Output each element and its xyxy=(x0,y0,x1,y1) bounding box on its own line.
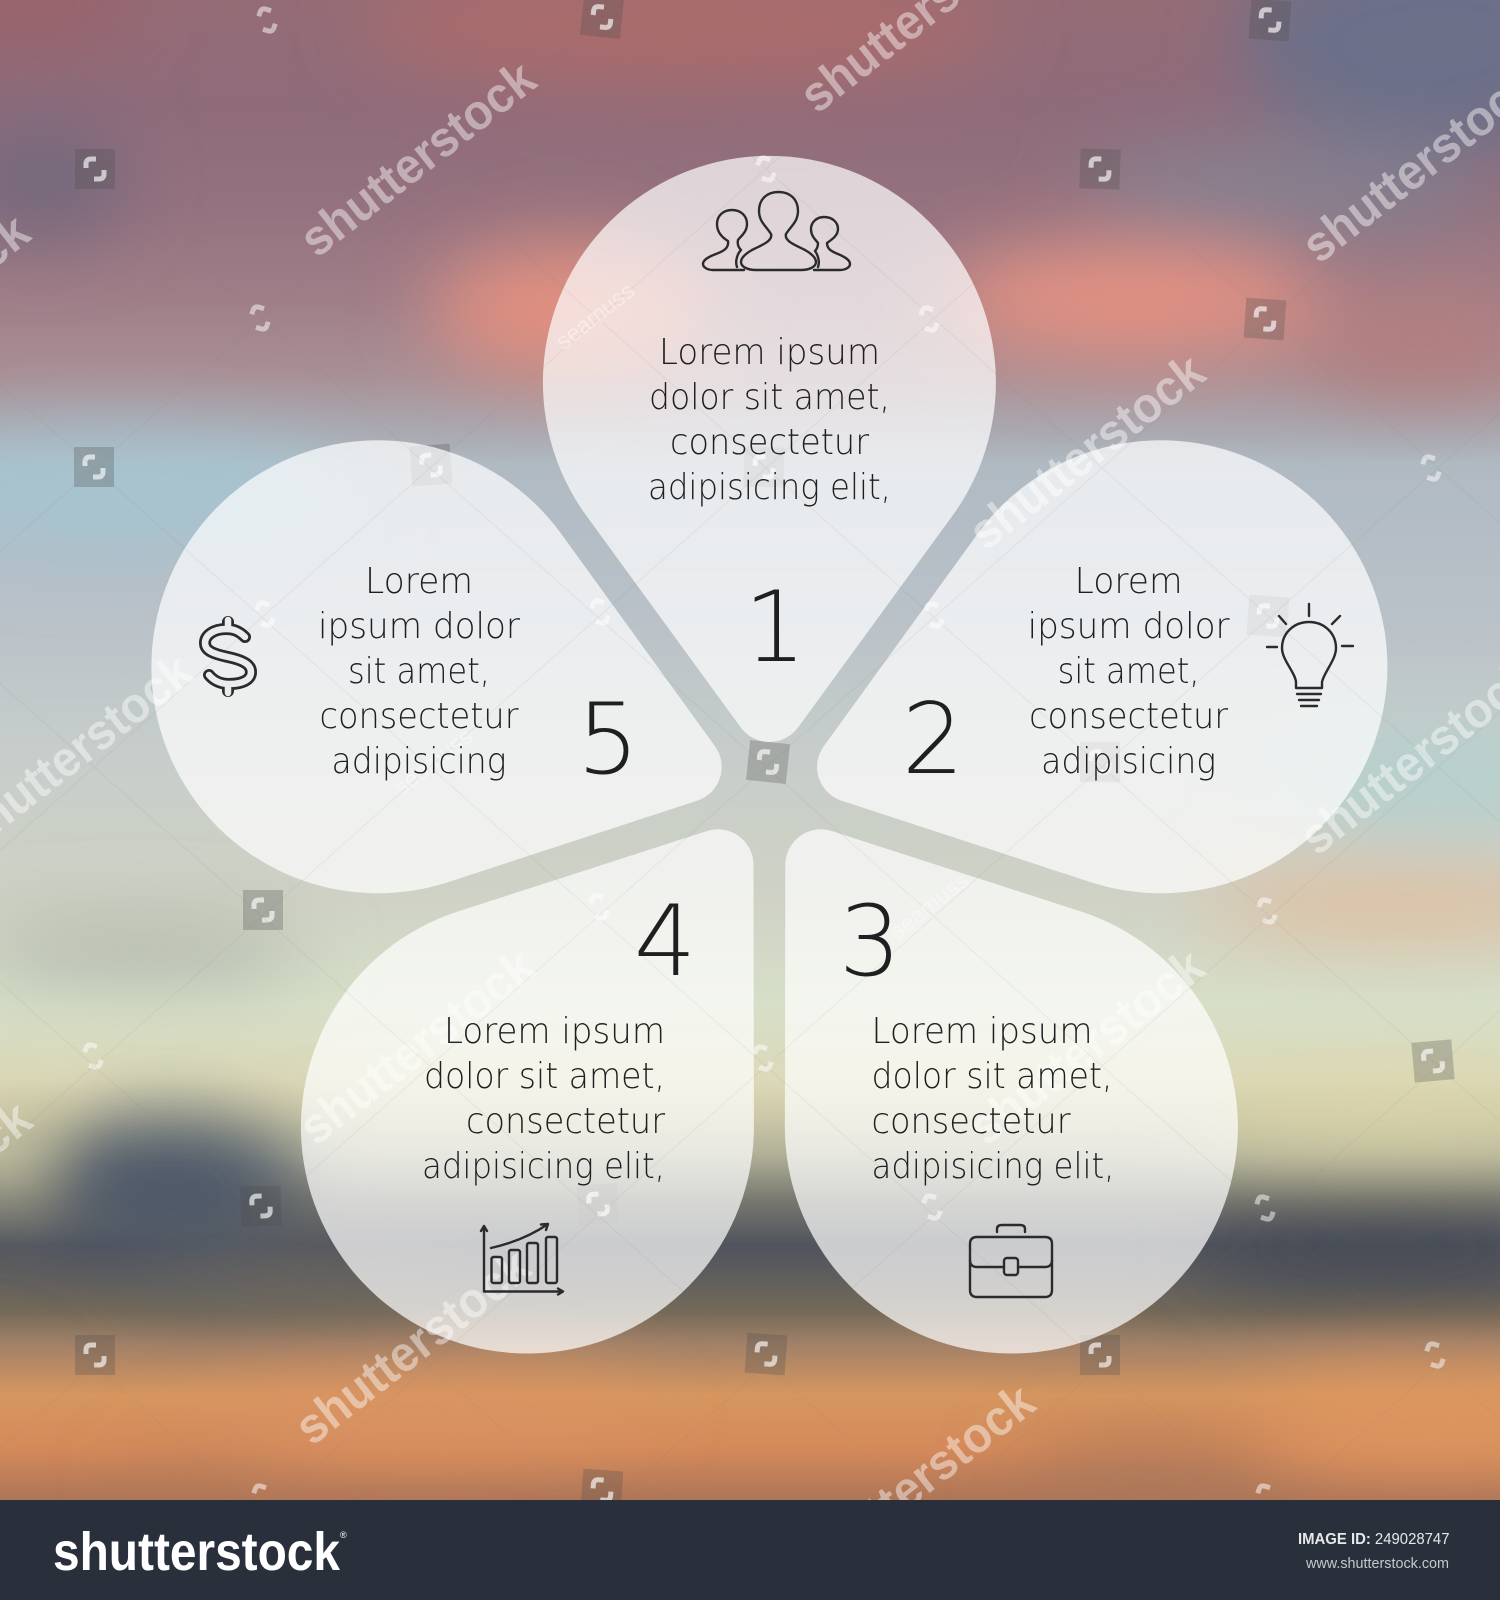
text: petal 5: ipsum dolor xyxy=(318,606,520,647)
text: petal 2: Lorem xyxy=(1075,561,1183,602)
text: petal 3: dolor sit amet, xyxy=(872,1056,1112,1097)
footer bar xyxy=(0,1500,1500,1600)
text: petal 5: consectetur xyxy=(320,696,519,737)
watermark: open hook icons over petals xyxy=(253,157,946,1219)
watermark: seamuss small text: seamuss xyxy=(885,867,973,944)
footer website: www.shutterstock.com xyxy=(1305,1555,1449,1572)
text: petal 1: adipisicing elit, xyxy=(648,467,891,508)
text: petal 5 xyxy=(318,561,520,782)
text: petal 2: adipisicing xyxy=(1041,741,1216,782)
watermark: seamuss small text: seamuss xyxy=(389,723,477,800)
text: petal 2 xyxy=(1028,561,1230,782)
watermark: diagonal shutterstock text: shutterstock xyxy=(958,343,1215,560)
watermark: diagonal shutterstock text: shutterstock xyxy=(284,1238,541,1455)
numbers: 2 xyxy=(902,683,964,797)
watermark: seamuss small text: seamuss xyxy=(551,277,639,354)
text: petal 2: ipsum dolor xyxy=(1028,606,1230,647)
icon: dollar sign xyxy=(205,620,251,693)
text: petal 2: sit amet, xyxy=(1058,651,1200,692)
text: petal 4: consectetur xyxy=(466,1101,665,1142)
text: petal 4: adipisicing elit, xyxy=(422,1146,665,1187)
text: petal 1: Lorem ipsum xyxy=(659,332,880,373)
petal 5 xyxy=(92,381,790,993)
text: petal 3: adipisicing elit, xyxy=(872,1146,1114,1187)
numbers: 1 xyxy=(744,571,806,685)
petal 1 xyxy=(543,156,996,742)
footer image id: IMAGE ID: 249028747 xyxy=(1298,1531,1450,1548)
text: petal 4 xyxy=(422,1011,665,1187)
petal 4 xyxy=(211,703,922,1443)
watermark: diagonal shutterstock text: shutterstock xyxy=(288,938,545,1155)
text: petal 3: Lorem ipsum xyxy=(872,1011,1092,1052)
footer registered mark: ® xyxy=(340,1530,347,1540)
numbers: 3 xyxy=(839,885,901,999)
watermark: diagonal shutterstock text: shutterstock xyxy=(958,938,1215,1155)
icon: light bulb xyxy=(1267,604,1353,706)
text: petal 1: consectetur xyxy=(670,422,869,463)
text: petal 4: Lorem ipsum xyxy=(444,1011,665,1052)
text: petal 3: consectetur xyxy=(872,1101,1071,1142)
numbers xyxy=(577,571,964,999)
text: petal 5: adipisicing xyxy=(332,741,506,782)
text: petal 1: dolor sit amet, xyxy=(649,377,890,418)
icon: people xyxy=(703,192,850,270)
petal 3 xyxy=(617,703,1328,1443)
text: petal 2: consectetur xyxy=(1029,696,1228,737)
text: petal 5: Lorem xyxy=(365,561,473,602)
icon: growth chart xyxy=(481,1224,563,1294)
text: petal 5: sit amet, xyxy=(348,651,490,692)
icon: briefcase xyxy=(970,1225,1052,1297)
petal 2 xyxy=(749,381,1446,993)
text: petal 4: dolor sit amet, xyxy=(424,1056,665,1097)
numbers: 4 xyxy=(634,885,696,999)
watermark: diagonal shutterstock text: shutterstock xyxy=(788,1373,1045,1590)
watermark: diagonal shutterstock text: shutterstock xyxy=(289,50,546,267)
footer logo: shutterstock xyxy=(53,1522,341,1582)
text: petal 3 xyxy=(872,1011,1114,1187)
text: petal 1 xyxy=(648,332,891,508)
watermark: seamuss small text xyxy=(389,277,973,944)
numbers: 5 xyxy=(577,683,639,797)
